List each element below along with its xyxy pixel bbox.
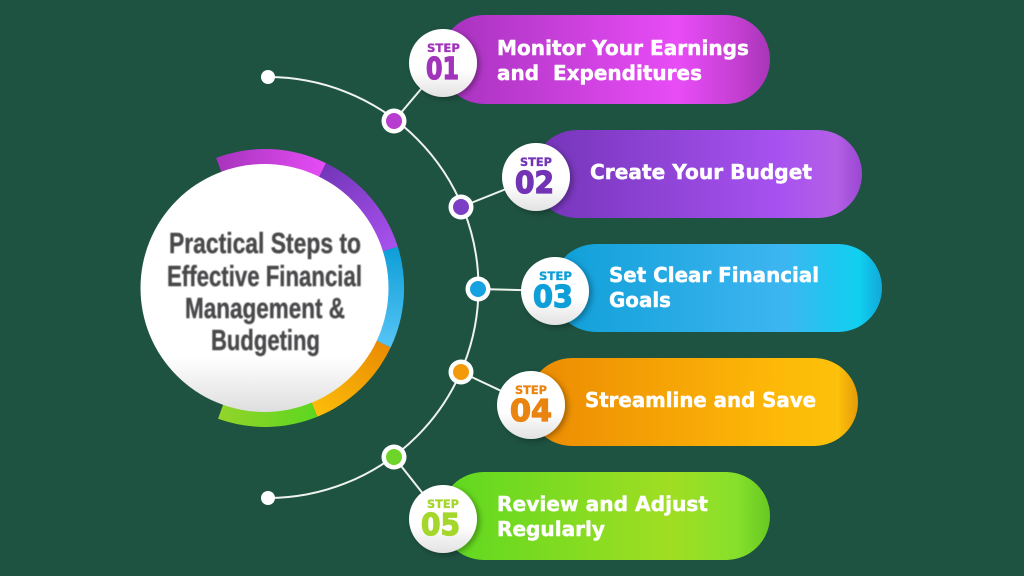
- node: step 5: [382, 444, 406, 470]
- step 4: [448, 358, 858, 446]
- badge: step 01: [409, 29, 477, 97]
- connector lines: [394, 63, 555, 519]
- pill: step 5: [440, 472, 770, 560]
- badge: step 04: STEP: [515, 383, 547, 397]
- node: step 1: [382, 108, 406, 134]
- node: step 3: [466, 276, 490, 302]
- badge: step 03: STEP: [539, 269, 572, 283]
- step 1 label text: Monitor Your Earnings: [497, 36, 749, 60]
- node: step 4: [448, 360, 474, 384]
- node: step 2: [448, 194, 474, 220]
- step 1 label text: and Expenditures: [497, 61, 702, 85]
- step 5 label text: [497, 492, 708, 541]
- step 1 label text: [497, 36, 749, 85]
- step 5 label text: Review and Adjust: [497, 492, 708, 516]
- step 3 label text: Set Clear Financial: [609, 263, 819, 287]
- title circle: [140, 164, 388, 412]
- badge: step 04: 04: [510, 394, 552, 429]
- badge: step 05: [409, 485, 477, 553]
- step 3 label text: Goals: [609, 288, 671, 312]
- title: [167, 228, 362, 357]
- badge: step 02: STEP: [520, 155, 552, 169]
- badge: step 03: 03: [533, 280, 573, 315]
- step 1: [382, 15, 770, 134]
- badge: step 05: STEP: [427, 497, 459, 511]
- central timeline arc: [261, 70, 478, 505]
- step 5 label text: Regularly: [497, 517, 605, 541]
- step 3: [466, 244, 882, 332]
- title: Effective Financial: [167, 261, 362, 293]
- badge: step 02: 02: [515, 166, 554, 201]
- pill: step 3: [552, 244, 882, 332]
- title: Practical Steps to: [169, 228, 361, 260]
- step 3 label text: [609, 263, 819, 312]
- pill: step 1: [440, 15, 770, 104]
- badge: step 01: 01: [426, 52, 459, 87]
- badge: step 03: [521, 257, 589, 325]
- title: Budgeting: [211, 325, 320, 357]
- badge: step 05: 05: [421, 508, 460, 543]
- step 4 label text: Streamline and Save: [585, 388, 816, 412]
- step 2: [448, 130, 862, 220]
- badge: step 01: STEP: [427, 41, 460, 55]
- pill: step 2: [533, 130, 862, 218]
- step 5: [382, 444, 770, 560]
- badge: step 02: [502, 143, 570, 211]
- pill: step 4: [528, 358, 858, 446]
- step 2 label text: Create Your Budget: [590, 160, 812, 184]
- badge: step 04: [497, 371, 565, 439]
- colored ring around title circle: [219, 158, 396, 418]
- title: Management &: [185, 293, 345, 325]
